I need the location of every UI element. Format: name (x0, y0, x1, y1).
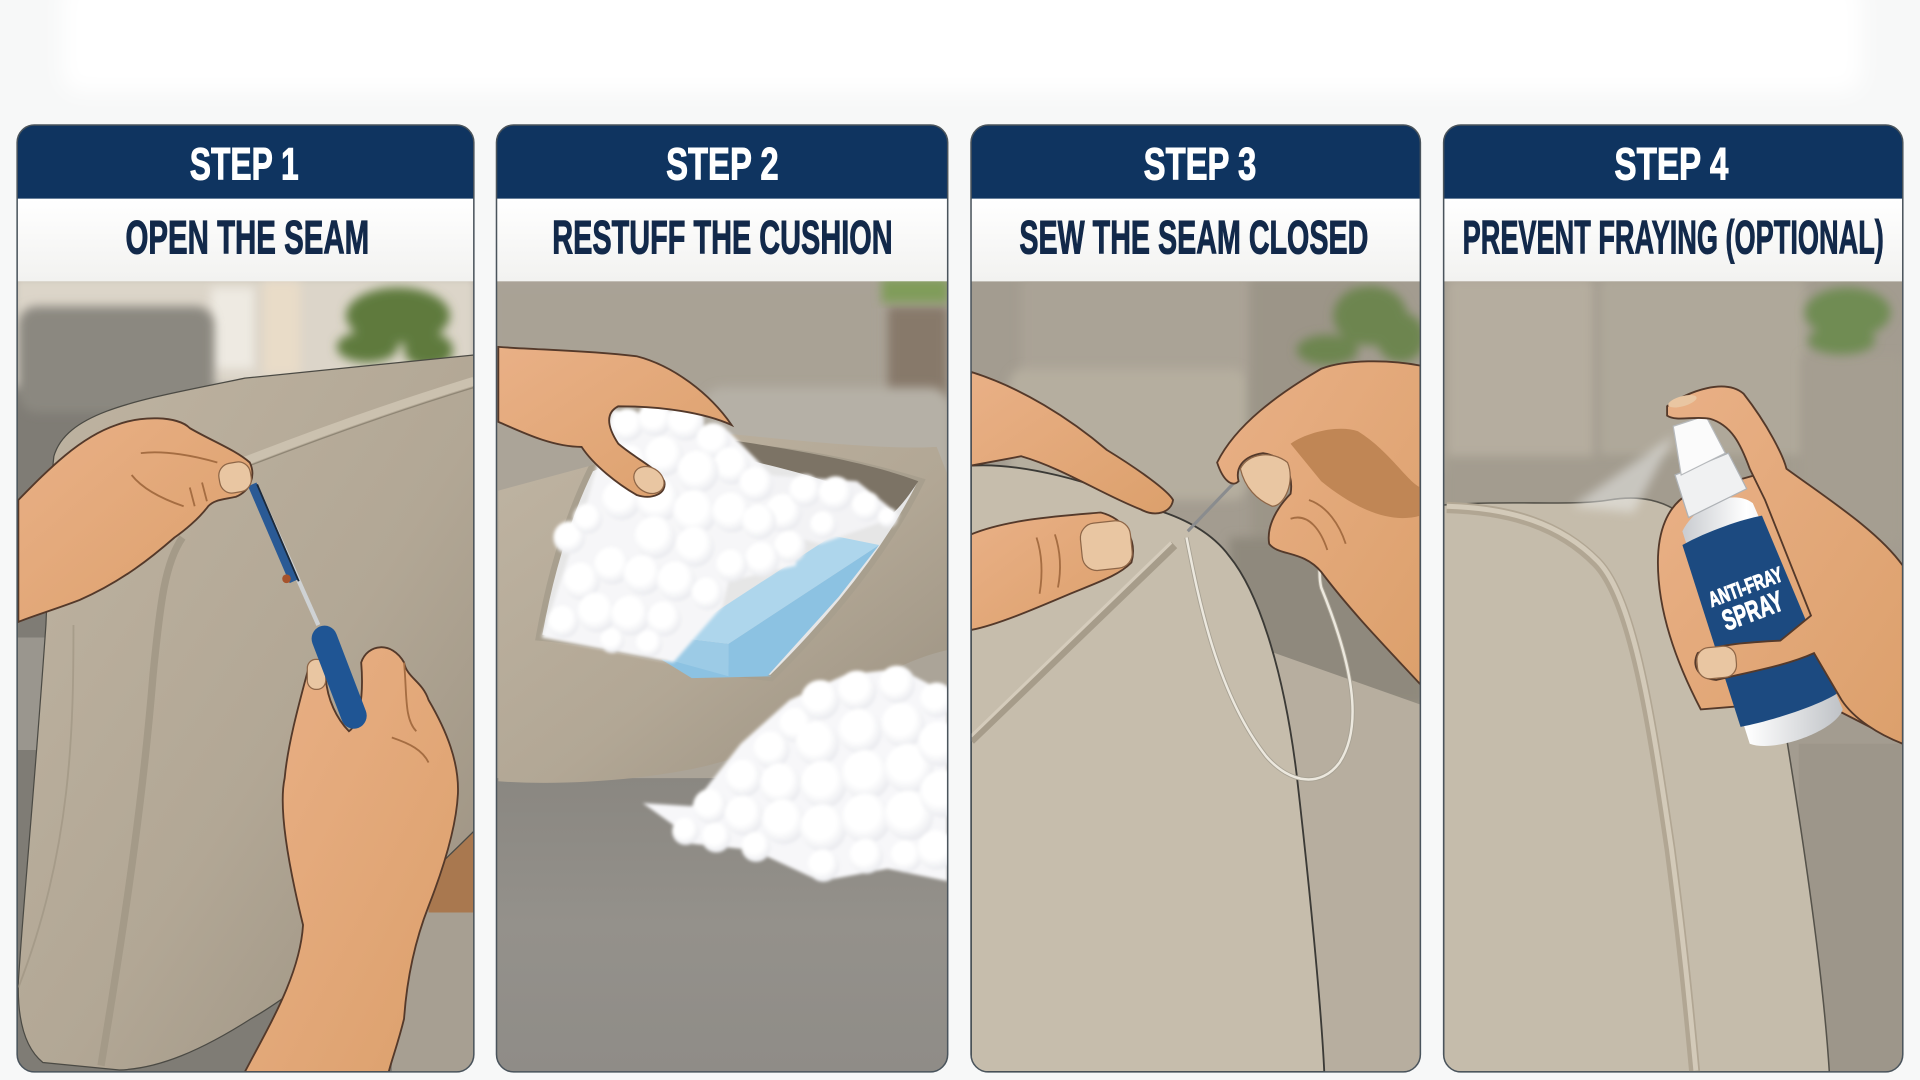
cushion arm (1444, 498, 1829, 1072)
polyester fill in cushion (542, 401, 900, 662)
step 2 header (496, 125, 948, 199)
step 1 header (17, 125, 474, 199)
panel: step 2 (490, 125, 966, 1072)
step 2 scene background (490, 278, 949, 1072)
spray mist (1572, 434, 1675, 512)
spray bottle (1673, 416, 1843, 746)
step 4 title (1444, 199, 1903, 281)
step 4 number: STEP 4 (1614, 140, 1728, 189)
cushion (971, 465, 1324, 1072)
lower left hand (971, 512, 1134, 630)
upper left hand (971, 372, 1173, 513)
left hand pulling fill (498, 347, 732, 499)
panel: step 1 (12, 125, 478, 1072)
left hand (18, 418, 253, 622)
spray bottle: SPRAY (1718, 585, 1788, 638)
open cushion (498, 434, 948, 783)
step 3 scene background (971, 278, 1425, 1075)
hand behind bottle (1658, 475, 1903, 744)
seam ripper handle (324, 639, 354, 716)
right column panels (971, 125, 1903, 1075)
panel: step 4 (1444, 125, 1903, 1075)
step 1 title (17, 199, 474, 281)
hand in front of bottle (1667, 387, 1903, 744)
step 2 title (496, 199, 948, 281)
step 2 number: STEP 2 (666, 140, 779, 189)
step 1 title: OPEN THE SEAM (126, 211, 369, 264)
right hand (245, 647, 458, 1072)
step 4 header (1444, 125, 1903, 199)
step 3 title (971, 199, 1420, 281)
cushion (18, 355, 474, 1070)
step 3 header (971, 125, 1420, 199)
blank title area (62, 0, 1862, 92)
step 3 number: STEP 3 (1144, 140, 1256, 189)
right hand (1217, 361, 1420, 684)
step 1 number: STEP 1 (190, 140, 299, 189)
step 2 title: RESTUFF THE CUSHION (552, 211, 893, 264)
polyester fill pile (643, 666, 966, 882)
needle and thread (1187, 480, 1353, 779)
left column panels (12, 125, 966, 1072)
bottle label: ANTI-FRAY (1706, 563, 1786, 612)
step 3 title: SEW THE SEAM CLOSED (1019, 211, 1368, 264)
seam ripper (252, 484, 318, 625)
foam block (661, 536, 879, 678)
step 1 scene background (12, 275, 478, 1072)
step 4 scene background (1444, 278, 1903, 1075)
panel: step 3 (971, 125, 1425, 1075)
